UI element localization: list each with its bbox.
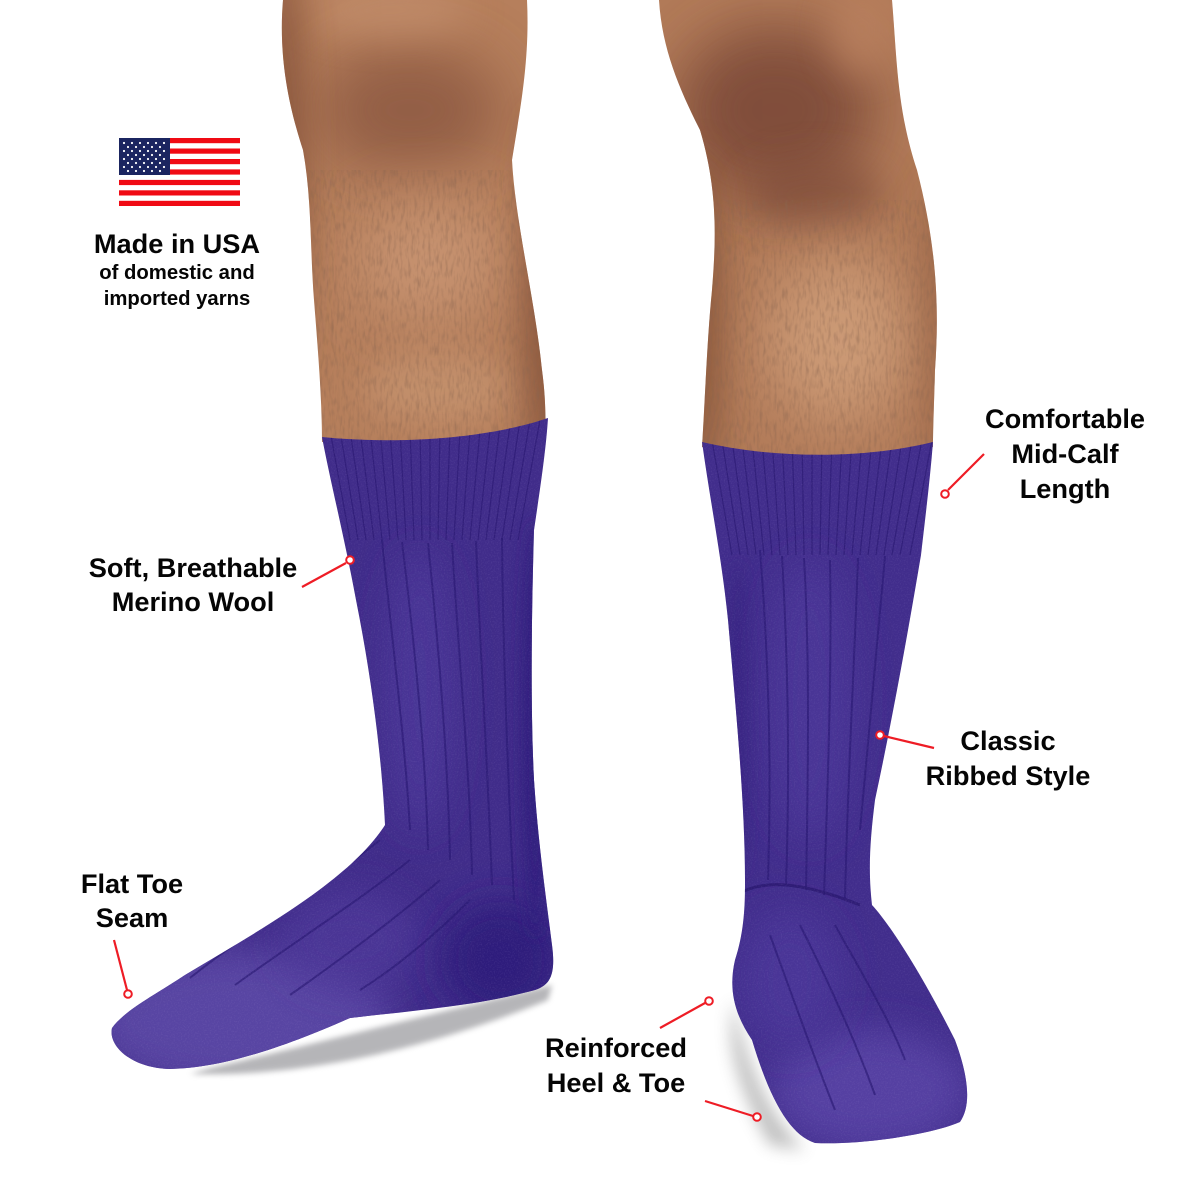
- leg ribs: [760, 550, 905, 1110]
- callout: reinforced heel and toe: Reinforced: [545, 1032, 687, 1063]
- cuff ribs: [712, 440, 932, 555]
- callout: classic ribbed style: Ribbed Style: [926, 760, 1090, 791]
- sock grain: [703, 444, 966, 1143]
- foot tone: [90, 950, 390, 1090]
- foot shadows: [190, 985, 805, 1150]
- callout: soft breathable merino wool: Merino Wool: [112, 586, 274, 617]
- text: made in USA: imported yarns: [104, 288, 250, 310]
- callout: reinforced heel and toe: [545, 997, 761, 1121]
- callout: flat toe seam: Flat Toe: [81, 868, 183, 899]
- heel crease: [742, 885, 860, 905]
- left sock: [90, 410, 560, 1090]
- leg ribs: [190, 538, 514, 995]
- callout: classic ribbed style: [876, 725, 1090, 791]
- callout: soft breathable merino wool: [89, 552, 354, 617]
- cuff ribs: [330, 420, 540, 540]
- flag: [119, 138, 240, 206]
- text: made in USA: of domestic and: [99, 262, 255, 284]
- callout: soft breathable merino wool: Soft, Breathable: [89, 552, 297, 583]
- callout: comfortable mid-calf length: Length: [1020, 473, 1110, 504]
- callout: flat toe seam: Seam: [96, 902, 168, 933]
- callout: reinforced heel and toe: Heel & Toe: [547, 1067, 685, 1098]
- callout: comfortable mid-calf length: [941, 403, 1145, 504]
- left leg: [282, 0, 546, 442]
- right leg: [659, 0, 937, 455]
- text: made in USA: [94, 228, 260, 310]
- text: made in USA: Made in USA: [94, 228, 260, 259]
- callout: flat toe seam: [81, 868, 183, 998]
- foot tone: [770, 1030, 970, 1150]
- sock grain: [100, 410, 560, 1080]
- callout: classic ribbed style: Classic: [960, 725, 1056, 756]
- right sock: [702, 442, 968, 1144]
- callout: comfortable mid-calf length: Comfortable: [985, 403, 1145, 434]
- callout: comfortable mid-calf length: Mid-Calf: [1011, 438, 1120, 469]
